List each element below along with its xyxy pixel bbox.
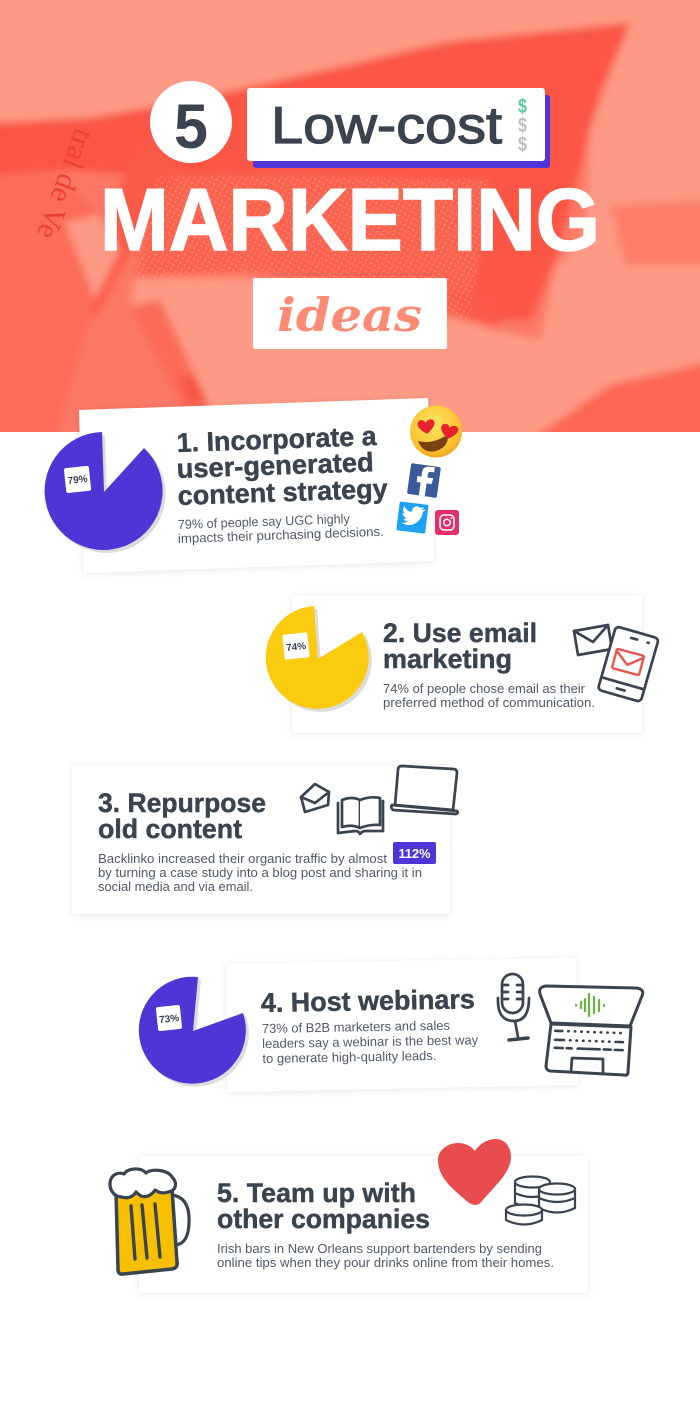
icon: heart eyes emoji bbox=[410, 406, 462, 458]
heading and text 3: social media and via email. bbox=[98, 879, 253, 894]
label: Low-cost: Low-cost bbox=[271, 97, 503, 155]
pie chart: 74% bbox=[266, 606, 372, 712]
icon: instagram bbox=[435, 510, 459, 535]
heading and text 5: other companies bbox=[217, 1204, 430, 1234]
heading and text 1: 79% of people say UGC highly bbox=[178, 511, 350, 532]
icon: beer mug bbox=[110, 1169, 189, 1274]
heading and text 4: to generate high-quality leads. bbox=[262, 1048, 437, 1066]
pie chart: 79% bbox=[45, 432, 166, 553]
card 5 background bbox=[139, 1156, 588, 1293]
panel 3: repurpose content bbox=[72, 765, 458, 914]
icon: stacks of coins bbox=[506, 1176, 575, 1224]
heading and text 3: old content bbox=[98, 814, 242, 844]
card 1 background bbox=[79, 398, 434, 573]
panel 4: host webinars bbox=[139, 958, 643, 1092]
heading and text 2: preferred method of communication. bbox=[383, 695, 595, 710]
icon: facebook bbox=[407, 463, 441, 498]
icon: envelope bbox=[574, 625, 612, 655]
heading and text 5: Irish bars in New Orleans support bartenders by sending bbox=[217, 1241, 542, 1256]
heading and text 1 bbox=[176, 421, 388, 546]
heading and text 3: by turning a case study into a blog post and sharing it in bbox=[98, 865, 422, 880]
heading and text 1: impacts their purchasing decisions. bbox=[178, 524, 384, 546]
panel 5: team up bbox=[110, 1139, 588, 1293]
heading and text 3 bbox=[98, 788, 422, 894]
icon: microphone bbox=[498, 974, 529, 1040]
panel 2: email marketing bbox=[266, 595, 659, 733]
heading and text 4: 4. Host webinars bbox=[261, 984, 475, 1018]
badge: 112% bbox=[393, 842, 436, 864]
number badge: 5 bbox=[150, 81, 232, 163]
label: Low-cost: $ bbox=[518, 134, 527, 156]
number badge: 5: 5 bbox=[174, 92, 208, 162]
icon: laptop with sound wave bbox=[540, 986, 643, 1075]
heading and text 2: marketing bbox=[383, 644, 512, 674]
heading: MARKETING: MARKETING bbox=[100, 170, 600, 269]
heading and text 5: 5. Team up with bbox=[217, 1178, 416, 1208]
icon: laptop bbox=[391, 766, 458, 814]
label: ideas bbox=[253, 278, 447, 349]
card 2 background bbox=[292, 595, 642, 733]
icon: open envelope bbox=[301, 784, 329, 812]
panel 1: user-generated content bbox=[45, 398, 462, 573]
pie chart: 74%: 74% bbox=[286, 641, 307, 654]
pie chart: 73%: 73% bbox=[159, 1013, 180, 1026]
hero banner: banknote photo in coral duotone bbox=[0, 0, 700, 440]
heading and text 2 bbox=[383, 618, 595, 710]
heading and text 3: Backlinko increased their organic traffic by almost bbox=[98, 851, 387, 866]
badge: 112%: 112% bbox=[398, 846, 431, 861]
heading and text 2: 74% of people chose email as their bbox=[383, 681, 586, 696]
label: Low-cost: $ bbox=[518, 96, 527, 118]
heading and text 1: user-generated bbox=[176, 447, 374, 484]
icon: open book bbox=[338, 797, 383, 834]
pie chart: 79%: 79% bbox=[67, 474, 88, 487]
heading and text 5: online tips when they pour drinks online from their homes. bbox=[217, 1255, 554, 1270]
label: Low-cost bbox=[247, 88, 550, 168]
label: ideas: ideas bbox=[277, 288, 422, 342]
title block bbox=[100, 81, 600, 349]
heading and text 1: content strategy bbox=[177, 474, 388, 511]
card 4 background bbox=[226, 958, 578, 1092]
heading and text 4 bbox=[261, 984, 479, 1066]
heading and text 3: 3. Repurpose bbox=[98, 788, 266, 818]
heading and text 1: 1. Incorporate a bbox=[176, 421, 378, 458]
pie chart: 73% bbox=[139, 977, 249, 1087]
heading and text 5 bbox=[217, 1178, 554, 1270]
icon: phone with envelope bbox=[598, 626, 659, 702]
heading and text 4: leaders say a webinar is the best way bbox=[262, 1032, 479, 1051]
label: Low-cost: $ bbox=[518, 115, 527, 137]
heading and text 2: 2. Use email bbox=[383, 618, 537, 648]
banknote lettering in the photo: tral de Ve bbox=[30, 125, 100, 243]
icon: twitter bbox=[396, 501, 429, 534]
heading and text 4: 73% of B2B marketers and sales bbox=[262, 1018, 451, 1036]
icon: heart bbox=[438, 1139, 511, 1205]
card 3 background bbox=[72, 765, 450, 914]
